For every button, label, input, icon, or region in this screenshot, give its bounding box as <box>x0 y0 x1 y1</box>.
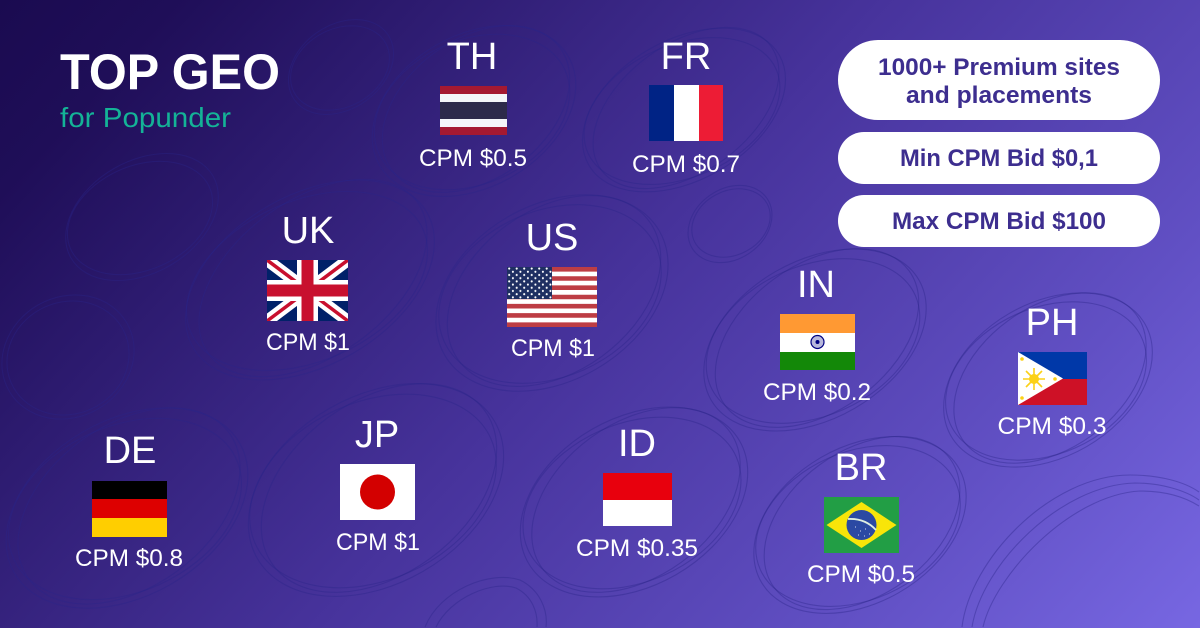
panel: Japan <box>336 414 420 556</box>
icon: Germany flag <box>92 481 167 537</box>
country code: US <box>526 217 578 259</box>
title: TOP GEO <box>60 44 280 100</box>
callout: premium sites: 1000+ Premium sites <box>878 54 1120 81</box>
country code: JP <box>355 414 399 456</box>
CPM value: CPM $1 <box>511 335 595 362</box>
icon: Brazil flag <box>824 497 899 553</box>
callout: premium sites <box>838 40 1160 120</box>
country code: BR <box>835 447 887 489</box>
CPM value: CPM $0.8 <box>75 545 183 572</box>
panel: Philippines <box>998 302 1106 440</box>
CPM value: CPM $0.2 <box>763 379 871 406</box>
CPM value: CPM $1 <box>266 329 350 356</box>
icon: Indonesia flag <box>603 473 672 526</box>
icon: India flag <box>780 314 855 370</box>
panel: Brazil <box>807 447 915 588</box>
country code: IN <box>797 264 835 306</box>
CPM value: CPM $0.35 <box>576 535 698 562</box>
country code: FR <box>661 36 711 78</box>
panel: Indonesia <box>576 423 698 562</box>
country code: UK <box>282 210 334 252</box>
country code: DE <box>104 430 156 472</box>
icon: Thailand flag <box>440 86 507 135</box>
callout: min bid <box>838 132 1160 184</box>
icon: Japan flag <box>340 464 415 520</box>
callout: max bid: Max CPM Bid $100 <box>892 208 1106 235</box>
icon: France flag <box>649 85 723 141</box>
panel: Germany <box>75 430 183 572</box>
panel: France <box>632 36 740 178</box>
panel: United Kingdom <box>266 210 350 356</box>
CPM value: CPM $0.7 <box>632 151 740 178</box>
icon: UK flag <box>267 260 348 321</box>
CPM value: CPM $1 <box>336 529 420 556</box>
CPM value: CPM $0.3 <box>998 413 1106 440</box>
country code: ID <box>618 423 656 465</box>
callout: premium sites: and placements <box>906 82 1092 109</box>
callout: min bid: Min CPM Bid $0,1 <box>900 145 1098 172</box>
callout: max bid <box>838 195 1160 247</box>
icon: Philippines flag <box>1018 352 1087 405</box>
country code: PH <box>1026 302 1078 344</box>
subtitle: for Popunder <box>60 102 231 133</box>
panel: United States <box>507 217 597 362</box>
icon: US flag <box>507 267 597 327</box>
CPM value: CPM $0.5 <box>419 145 527 172</box>
panel: India <box>763 264 871 406</box>
country code: TH <box>447 36 497 78</box>
CPM value: CPM $0.5 <box>807 561 915 588</box>
panel: Thailand <box>419 36 527 172</box>
